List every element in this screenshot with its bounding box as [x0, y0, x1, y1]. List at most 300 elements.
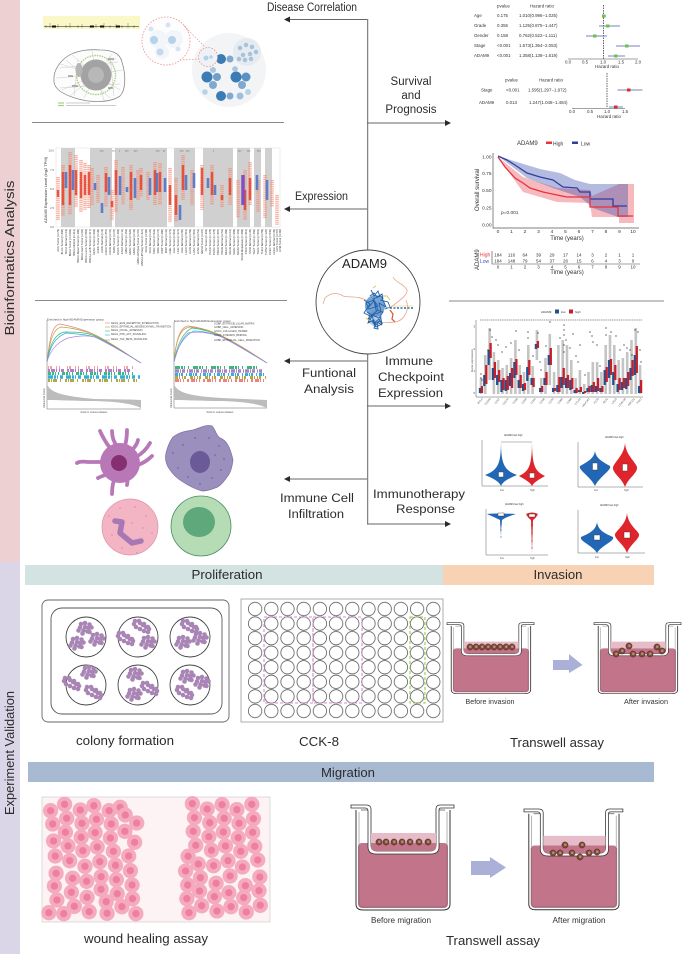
- chart: violin plot 1: low: [500, 489, 504, 492]
- table: number at risk: 7: [591, 264, 594, 270]
- chart: univariate forest plot: 0.158: [497, 33, 509, 38]
- chart: multivariate forest plot: 0.0: [569, 109, 576, 114]
- chart: ADAM9 pan-cancer expression: DLBC Tumor (n=47): [112, 229, 116, 253]
- chart: immune checkpoint boxplot: 3: [473, 324, 475, 328]
- chart: univariate forest plot: Gender: [474, 33, 489, 38]
- illustration: transwell after invasion: After invasion: [624, 699, 668, 706]
- table: number at risk: 1: [618, 252, 621, 258]
- arrow: disease correlation: [284, 16, 367, 22]
- side band: Experiment Validation: [0, 562, 20, 954]
- legend: high: [575, 310, 581, 314]
- illustration: transwell before invasion: Before invasion: [466, 699, 515, 706]
- chart: GSEA high ADAM9 expression group: KEGG_FOCAL_ADHESION: [111, 329, 143, 332]
- chart: immune checkpoint boxplot: CD48: [538, 397, 546, 405]
- chart: ADAM9 pan-cancer expression: PRAD Normal (n=52): [220, 229, 224, 254]
- chart: ADAM9 pan-cancer expression: ***: [156, 150, 160, 154]
- banner: Migration: [28, 762, 654, 782]
- chart: ADAM9 pan-cancer expression: BRCA-LumB Tumor (n=217): [88, 229, 92, 263]
- chart: violin plot 4: [578, 504, 645, 559]
- arrow: expression: [284, 206, 367, 212]
- table: number at risk: 3: [537, 264, 540, 270]
- heading: Disease Correlation: Disease Correlation: [267, 2, 357, 14]
- chart: ADAM9 pan-cancer expression: KIRP Normal (n=32): [164, 229, 168, 253]
- illustration: transwell after migration: [524, 809, 623, 925]
- chart: GSEA high ADAM9 expression group: [43, 318, 171, 414]
- chart: ADAM9 pan-cancer expression: LUSC Normal (n=51): [196, 229, 200, 254]
- chart: ADAM9 pan-cancer expression: COAD Tumor (n=457): [104, 229, 108, 255]
- table: number at risk: Low: [480, 259, 490, 265]
- chart: GSEA low ADAM9 expression group: GOMF_INTEGRIN_BINDING: [214, 334, 247, 337]
- chart: ADAM9 pan-cancer expression: READ Normal (n=10): [228, 229, 232, 254]
- banner: Invasion: Invasion: [534, 568, 583, 582]
- chart: ADAM9 pan-cancer expression: MESO Tumor (n=87): [200, 229, 204, 254]
- chart: Kaplan-Meier survival curve: Overall survival: [474, 169, 481, 211]
- caption: Transwell assay, invasion: Transwell assay: [510, 736, 605, 750]
- chart: GSEA low ADAM9 expression group: GOBP_CELL_ADHESION: [214, 326, 244, 329]
- chart: univariate forest plot: Hazard ratio: [595, 64, 620, 69]
- divider: right: [449, 300, 664, 302]
- divider: left lower: [35, 300, 287, 302]
- chart: univariate forest plot: 1.673(1.364−2.053): [519, 43, 558, 48]
- chart: univariate forest plot: pvalue: [497, 4, 510, 8]
- banner: Migration: Migration: [321, 766, 375, 780]
- banner: Proliferation: Proliferation: [192, 568, 263, 582]
- chart: GSEA high ADAM9 expression group: KEGG_EPITHELIAL_MESENCHYMAL_TRANSITION: [111, 326, 171, 328]
- chart: ADAM9 pan-cancer expression: UVM Tumor (n=80): [278, 229, 282, 252]
- chart: GSEA low ADAM9 expression group: GOBP_EXTRACELLULAR_MATRIX: [214, 322, 255, 326]
- chart: univariate forest plot: Hazard ratio: [530, 4, 554, 8]
- illustration: colony formation plate: [42, 600, 229, 722]
- chart: immune checkpoint boxplot: CD27: [493, 397, 501, 405]
- illustration: transwell after migration: After migration: [552, 915, 606, 925]
- chart: ADAM9 pan-cancer expression: 10.0: [49, 148, 54, 152]
- icon: neutrophil: [102, 499, 158, 555]
- chart: univariate forest plot: 1.125(0.875−1.447): [519, 23, 558, 28]
- chart: ADAM9 pan-cancer expression: CHOL Normal (n=9): [100, 229, 104, 253]
- chart: ADAM9 pan-cancer expression: HNSC-HPVpos Tumor (n=97): [136, 229, 140, 264]
- arrow: immune checkpoint: [367, 403, 451, 409]
- icon: dendritic cell: [77, 430, 152, 494]
- heading: Immunotherapy Response: [373, 489, 465, 516]
- chart: multivariate forest plot: pvalue: [505, 78, 518, 82]
- chart: immune checkpoint boxplot: CD70: [547, 397, 555, 405]
- chart: immune checkpoint boxplot: 2: [473, 347, 475, 351]
- chart: Kaplan-Meier survival curve: [474, 141, 639, 242]
- chart: ADAM9 pan-cancer expression: LIHC Tumor (n=371): [176, 229, 180, 254]
- table: number at risk: 0: [497, 264, 500, 270]
- chart: univariate forest plot: 0.762(0.522−1.111): [519, 33, 557, 38]
- chart: Kaplan-Meier survival curve: 7: [591, 229, 594, 235]
- heading: Funtional Analysis: [302, 368, 356, 396]
- chart: immune checkpoint boxplot: PDCD1: [627, 397, 636, 407]
- table: number at risk: 54: [536, 258, 541, 264]
- chart: multivariate forest plot: Stage: [481, 88, 493, 92]
- chart: GSEA high ADAM9 expression group: Rank in ordered dataset: [81, 411, 108, 414]
- chart: ADAM9 pan-cancer expression: LUAD Normal (n=59): [188, 229, 192, 254]
- chart: ADAM9 pan-cancer expression: HNSC Normal (n=44): [132, 229, 136, 255]
- chart: violin plot 2: ADAM9 low high: [605, 436, 624, 439]
- chart: GSEA low ADAM9 expression group: Ranked list metric: [170, 387, 173, 408]
- chart: ADAM9 pan-cancer expression: THYM Tumor (n=120): [264, 229, 268, 255]
- chart: ADAM9 pan-cancer expression: LAML Tumor (n=173): [168, 229, 172, 254]
- chart: GSEA low ADAM9 expression group: GOCC_COLLAGEN_TRIMER: [214, 330, 248, 333]
- chart: violin plot 3: low: [500, 557, 504, 560]
- table: number at risk: High: [480, 252, 491, 258]
- chart: ADAM9 pan-cancer expression: LUSC Tumor (n=501): [192, 229, 196, 255]
- chart: univariate forest plot: 1.010(0.996−1.025): [519, 13, 558, 18]
- chart: ADAM9 pan-cancer expression: BRCA Normal (n=112): [72, 229, 76, 256]
- chart: GSEA high ADAM9 expression group: KEGG_PI3K_AKT_SIGNALING: [111, 333, 146, 336]
- table: number at risk: 3: [618, 258, 621, 264]
- protein interaction network: [142, 17, 266, 107]
- chart: immune checkpoint boxplot: CTLA4: [573, 397, 582, 406]
- chart: ADAM9 pan-cancer expression: PRAD Tumor (n=497): [216, 229, 220, 255]
- chart: univariate forest plot: 2.0: [635, 60, 642, 64]
- table: number at risk: 116: [508, 252, 516, 258]
- heading: Survival and Prognosis: [385, 76, 437, 116]
- chart: univariate forest plot: Stage: [474, 43, 486, 48]
- table: number at risk: 4: [551, 264, 554, 270]
- table: number at risk: 6: [578, 264, 581, 270]
- chart: immune checkpoint boxplot: CD40: [520, 397, 528, 405]
- banner: Proliferation: [25, 565, 443, 585]
- chart: ADAM9 pan-cancer expression: BRCA-Her2 Tumor (n=82): [80, 229, 84, 260]
- chart: immune checkpoint boxplot: [470, 310, 643, 408]
- heading: Funtional Analysis: Funtional: [302, 368, 356, 380]
- chart: ADAM9 pan-cancer expression: ***: [180, 150, 184, 154]
- chart: multivariate forest plot: 1.247(1.048−1.484): [529, 100, 568, 105]
- central circle: ADAM9 protein structure: [316, 250, 420, 354]
- chart: immune checkpoint boxplot: HAVCR2: [581, 397, 591, 408]
- heading: Immune Checkpoint Expression: Immune: [385, 356, 433, 368]
- chromosome strip: [43, 16, 140, 29]
- side band: Bioinformatics Analysis: Bioinformatics Analysis: [3, 180, 17, 336]
- chart: immune checkpoint boxplot: ICOS: [592, 397, 600, 405]
- table: number at risk: 39: [536, 252, 541, 258]
- table: number at risk: 8: [605, 264, 608, 270]
- chart: ADAM9 pan-cancer expression: LUAD Tumor (n=515): [184, 229, 188, 255]
- chart: ADAM9 pan-cancer expression: BRCA-Basal Tumor (n=190): [76, 229, 80, 263]
- table: number at risk: 1: [632, 252, 635, 258]
- chart: Kaplan-Meier survival curve: 0.25: [482, 206, 492, 212]
- table: number at risk: 184: [494, 258, 502, 264]
- heading: Immune Checkpoint Expression: Expression: [378, 388, 443, 400]
- chart: ADAM9 pan-cancer expression: THCA Tumor (n=501): [256, 229, 260, 255]
- chart: ADAM9 pan-cancer expression: HNSC Tumor (n=520): [128, 229, 132, 255]
- table: number at risk: ADAM9: [475, 249, 481, 270]
- chart: ADAM9 pan-cancer expression: BLCA Tumor (n=408): [60, 229, 64, 254]
- chart: ADAM9 pan-cancer expression: BLCA Normal (n=19): [64, 229, 68, 254]
- table: number at risk: 15: [576, 258, 582, 264]
- side band: Experiment Validation: Experiment Validation: [3, 691, 17, 815]
- chart: Kaplan-Meier survival curve: 0.00: [482, 222, 492, 228]
- chart: violin plot 4: ADAM9 low high: [600, 504, 619, 507]
- chart: ADAM9 pan-cancer expression: ***: [125, 150, 129, 154]
- chart: ADAM9 pan-cancer expression: LIHC Normal (n=50): [180, 229, 184, 253]
- chart: Kaplan-Meier survival curve: 0.50: [482, 188, 492, 194]
- chart: ADAM9 pan-cancer expression: CHOL Tumor (n=36): [96, 229, 100, 253]
- caption: colony formation: colony formation: [76, 734, 174, 748]
- chart: multivariate forest plot: ADAM9: [479, 100, 495, 105]
- chart: ADAM9 pan-cancer expression: 2.5: [50, 206, 54, 210]
- chart: GSEA low ADAM9 expression group: GOBP_EPITHELIAL_CELL_MIGRATION: [214, 339, 260, 342]
- illustration: transwell after invasion: [594, 623, 681, 706]
- chart: Kaplan-Meier survival curve: 4: [551, 229, 554, 235]
- chart: GSEA low ADAM9 expression group: Rank in ordered dataset: [207, 411, 234, 414]
- chart: ADAM9 pan-cancer expression: PCPG Tumor (n=179): [212, 229, 216, 255]
- chart: univariate forest plot: 1.5: [618, 60, 625, 64]
- heading: Survival and Prognosis: Survival: [391, 76, 431, 88]
- illustration: wound healing assay: [41, 796, 270, 922]
- arrow: survival and prognosis: [367, 120, 451, 126]
- chart: univariate forest plot: 0.355: [497, 23, 509, 28]
- chart: multivariate forest plot: <0.001: [506, 88, 520, 92]
- heading: Expression: Expression: [295, 191, 348, 203]
- cell pathway diagram: [54, 50, 125, 106]
- chart: immune checkpoint boxplot: BTLA: [476, 397, 484, 405]
- chart: ADAM9 pan-cancer expression: ***: [112, 150, 116, 154]
- chart: ADAM9 pan-cancer expression: ***: [134, 150, 138, 154]
- table: number at risk: 64: [522, 252, 528, 258]
- chart: multivariate forest plot: [479, 73, 642, 119]
- chart: ADAM9 pan-cancer expression: [44, 148, 282, 266]
- illustration: transwell before invasion: [447, 623, 534, 706]
- chart: ADAM9 pan-cancer expression: ESCA Tumor (n=184): [116, 229, 120, 255]
- icon: lymphocyte: [171, 496, 231, 556]
- table: number at risk: Time (years): [550, 270, 584, 276]
- table: number at risk: 26: [563, 258, 568, 264]
- chart: GSEA high ADAM9 expression group: KEGG_TGF_BETA_SIGNALING: [111, 338, 147, 341]
- chart: Kaplan-Meier survival curve: 8: [605, 229, 608, 235]
- chart: ADAM9 pan-cancer expression: UCEC Normal (n=35): [272, 229, 276, 255]
- chart: violin plot 4: low: [595, 556, 599, 559]
- chart: ADAM9 pan-cancer expression: KICH Tumor (n=66): [144, 229, 148, 252]
- table: number at risk: 148: [508, 258, 516, 264]
- chart: violin plot 3: ADAM9 low high: [505, 503, 524, 506]
- chart: univariate forest plot: ADAM9: [474, 53, 490, 58]
- heading: Immunotherapy Response: Immunotherapy: [373, 489, 465, 501]
- chart: ADAM9 pan-cancer expression: TGCT Tumor (n=150): [252, 229, 256, 255]
- chart: ADAM9 pan-cancer expression: 5.0: [50, 187, 54, 191]
- caption: CCK-8: CCK-8: [299, 735, 339, 749]
- chart: Kaplan-Meier survival curve: 0: [497, 229, 500, 235]
- arrow: migration: [471, 857, 506, 878]
- chart: ADAM9 pan-cancer expression: ACC Tumor (n=79): [56, 229, 60, 252]
- chart: Kaplan-Meier survival curve: 0.75: [482, 171, 492, 177]
- chart: Kaplan-Meier survival curve: p=0.001: [501, 210, 519, 216]
- chart: Kaplan-Meier survival curve: 3: [537, 229, 540, 235]
- chart: ADAM9 pan-cancer expression: UCEC Tumor (n=545): [268, 229, 272, 255]
- chart: immune checkpoint boxplot: CD200: [483, 397, 492, 406]
- chart: ADAM9 pan-cancer expression: KIRC Tumor (n=533): [152, 229, 156, 254]
- arrow: invasion: [553, 654, 582, 673]
- chart: multivariate forest plot: 1.0: [604, 109, 611, 114]
- chart: Kaplan-Meier survival curve: 9: [618, 229, 621, 235]
- chart: univariate forest plot: Grade: [474, 23, 487, 28]
- chart: ADAM9 pan-cancer expression: **: [163, 150, 166, 154]
- chart: multivariate forest plot: Hazard ratio: [597, 114, 622, 119]
- chart: violin plot 2: high: [624, 489, 629, 492]
- chart: ADAM9 pan-cancer expression: OV Tumor (n=303): [204, 229, 208, 251]
- chart: univariate forest plot: <0.001: [497, 43, 511, 48]
- chart: immune checkpoint boxplot: TIGIT: [635, 397, 643, 405]
- heading: Immunotherapy Response: Response: [396, 504, 455, 516]
- chart: violin plot 1: high: [530, 489, 535, 492]
- chart: immune checkpoint boxplot: CD86: [565, 397, 573, 405]
- table: number at risk: 4: [605, 258, 608, 264]
- chart: Kaplan-Meier survival curve: 5: [564, 229, 567, 235]
- chart: univariate forest plot: 0.5: [582, 60, 589, 64]
- chart: univariate forest plot: 0.0: [565, 60, 572, 64]
- chart: ADAM9 pan-cancer expression: SARC Tumor (n=259): [232, 229, 236, 255]
- banner: Invasion: [443, 565, 654, 585]
- chart: Kaplan-Meier survival curve: 1.00: [482, 154, 492, 160]
- legend: ADAM9: [517, 141, 538, 147]
- chart: immune checkpoint boxplot: CD274: [501, 397, 510, 406]
- chart: ADAM9 pan-cancer expression: ESCA Normal (n=11): [120, 229, 124, 254]
- table: number at risk: 2: [605, 252, 608, 258]
- icon: macrophage: [165, 425, 233, 491]
- chart: immune checkpoint boxplot: LAG3: [610, 397, 618, 405]
- chart: ADAM9 pan-cancer expression: READ Tumor (n=166): [224, 229, 228, 255]
- chart: ADAM9 pan-cancer expression: UCS Tumor (n=57): [275, 229, 279, 252]
- table: number at risk: 0: [632, 258, 635, 264]
- chart: violin plot 1: ADAM9 low high: [504, 434, 523, 437]
- chart: GSEA high ADAM9 expression group: Ranked list metric: [43, 387, 46, 408]
- chart: ADAM9 pan-cancer expression: THCA Normal (n=59): [260, 229, 264, 254]
- illustration: transwell before migration: [351, 805, 454, 925]
- chart: univariate forest plot: 1.0: [600, 60, 607, 64]
- table: number at risk: 29: [549, 252, 555, 258]
- heading: Immune Checkpoint Expression: [378, 356, 445, 400]
- table: number at risk: 184: [494, 252, 502, 258]
- chart: ADAM9 pan-cancer expression: CESC Tumor (n=304): [92, 229, 96, 255]
- heading: Survival and Prognosis: Prognosis: [385, 104, 437, 116]
- legend: [541, 310, 581, 314]
- chart: ADAM9 pan-cancer expression: ***: [257, 150, 261, 154]
- chart: immune checkpoint boxplot: CD28: [511, 397, 519, 405]
- caption: wound healing assay: wound healing assay: [83, 932, 209, 946]
- chart: ADAM9 pan-cancer expression: 0.0: [50, 225, 54, 229]
- heading: Immune Cell Infiltration: [280, 493, 354, 521]
- table: number at risk: [475, 249, 640, 276]
- chart: GSEA high ADAM9 expression group: KEGG_ECM_RECEPTOR_INTERACTION: [111, 322, 159, 325]
- chart: ADAM9 pan-cancer expression: PAAD Tumor (n=178): [208, 229, 212, 255]
- chart: univariate forest plot: [474, 4, 642, 69]
- heading: Immune Checkpoint Expression: Checkpoint: [378, 372, 445, 384]
- chart: ADAM9 pan-cancer expression: ADAM9 Expression Level (log2 TPM): [44, 157, 48, 223]
- chart: immune checkpoint boxplot: CD80: [556, 397, 564, 405]
- chart: ADAM9 pan-cancer expression: LGG Tumor (n=516): [172, 229, 176, 253]
- heading: Immune Cell Infiltration: Infiltration: [288, 509, 344, 521]
- chart: ADAM9 pan-cancer expression: HNSC-HPVneg Tumor (n=421): [140, 229, 144, 266]
- table: number at risk: 5: [564, 264, 567, 270]
- table: number at risk: 10: [630, 264, 636, 270]
- chart: multivariate forest plot: Hazard ratio: [539, 78, 563, 82]
- legend: low: [561, 310, 566, 314]
- chart: ADAM9 pan-cancer expression: ***: [186, 150, 190, 154]
- table: number at risk: 79: [522, 258, 528, 264]
- chart: multivariate forest plot: 0.013: [506, 100, 518, 105]
- chart: ADAM9 pan-cancer expression: ***: [100, 150, 104, 154]
- illustration: transwell before migration: Before migration: [371, 915, 431, 925]
- chart: ADAM9 pan-cancer expression: ***: [247, 150, 251, 154]
- chart: ADAM9 pan-cancer expression: 7.5: [50, 168, 54, 172]
- chart: GSEA low ADAM9 expression group: [170, 319, 267, 414]
- heading: Funtional Analysis: Analysis: [304, 384, 354, 396]
- table: number at risk: 37: [549, 258, 555, 264]
- chart: ADAM9 pan-cancer expression: STAD Normal (n=35): [248, 229, 252, 254]
- chart: ADAM9 pan-cancer expression: STAD Tumor (n=415): [244, 229, 248, 254]
- connector trunk: [367, 19, 369, 524]
- chart: GSEA high ADAM9 expression group: Enriched in high ADAM9 Expression group: [47, 318, 104, 322]
- arrow: immunotherapy response: [367, 521, 451, 527]
- chart: immune checkpoint boxplot: CD44: [529, 397, 537, 405]
- chart: violin plot 3: [486, 503, 548, 560]
- arrow: immune cell infiltration: [284, 476, 367, 482]
- legend: [517, 141, 591, 148]
- chart: Kaplan-Meier survival curve: 6: [578, 229, 581, 235]
- divider: left upper: [32, 122, 284, 124]
- table: number at risk: 3: [591, 252, 594, 258]
- chart: Kaplan-Meier survival curve: 2: [524, 229, 527, 235]
- chart: univariate forest plot: Age: [474, 13, 482, 18]
- chart: ADAM9 pan-cancer expression: GBM Tumor (n=153): [124, 229, 128, 254]
- chart: ADAM9 pan-cancer expression: KIRP Tumor (n=290): [160, 229, 164, 254]
- side band: Bioinformatics Analysis: [0, 0, 20, 562]
- table: number at risk: 9: [618, 264, 621, 270]
- chart: ADAM9 pan-cancer expression: SKCM Metastasis (n=368): [240, 229, 244, 260]
- chart: ADAM9 pan-cancer expression: KIRC Normal (n=72): [156, 229, 160, 253]
- heading: Survival and Prognosis: and: [401, 90, 421, 102]
- chart: Kaplan-Meier survival curve: 1: [510, 229, 513, 235]
- chart: multivariate forest plot: 0.5: [587, 109, 594, 114]
- chart: ADAM9 pan-cancer expression: *: [119, 150, 121, 154]
- illustration: 96-well CCK-8 plate: [241, 599, 443, 722]
- chart: multivariate forest plot: 1.5: [622, 109, 629, 114]
- chart: ADAM9 pan-cancer expression: COAD Normal (n=41): [108, 229, 112, 255]
- table: number at risk: 6: [591, 258, 594, 264]
- chart: multivariate forest plot: 1.595(1.297−1.972): [528, 88, 567, 92]
- chart: violin plot 4: high: [625, 556, 630, 559]
- legend: ADAM9: [541, 310, 552, 314]
- chart: ADAM9 pan-cancer expression: BRCA-LumA Tumor (n=564): [84, 229, 88, 263]
- chart: univariate forest plot: 1.358(1.138−1.619): [519, 53, 558, 58]
- chart: violin plot 1: [482, 434, 548, 492]
- legend: High: [553, 142, 564, 148]
- chart: ADAM9 pan-cancer expression: BRCA Tumor (n=1093): [68, 229, 72, 256]
- central circle: ADAM9 protein structure: ADAM9: [342, 256, 387, 271]
- chart: violin plot 2: low: [594, 489, 598, 492]
- chart: univariate forest plot: <0.001: [497, 53, 511, 58]
- chart: Kaplan-Meier survival curve: 10: [630, 229, 636, 235]
- chart: ADAM9 pan-cancer expression: SKCM Tumor (n=103): [236, 229, 240, 255]
- chart: GSEA low ADAM9 expression group: Enriched in high ADAM9 Expression group: [174, 319, 231, 323]
- table: number at risk: 2: [524, 264, 527, 270]
- table: number at risk: 1: [510, 264, 513, 270]
- table: number at risk: 14: [576, 252, 582, 258]
- legend: Low: [581, 142, 591, 148]
- chart: immune checkpoint boxplot: IDO1: [602, 397, 609, 404]
- chart: violin plot 3: high: [530, 557, 535, 560]
- chart: univariate forest plot: 0.175: [497, 13, 509, 18]
- caption: Transwell assay, migration: Transwell assay: [446, 934, 541, 948]
- chart: immune checkpoint boxplot: 0: [473, 391, 475, 395]
- chart: ADAM9 pan-cancer expression: *: [213, 150, 215, 154]
- table: number at risk: 17: [563, 252, 568, 258]
- chart: Kaplan-Meier survival curve: Time (years): [550, 236, 584, 242]
- chart: immune checkpoint boxplot: 1: [473, 369, 475, 373]
